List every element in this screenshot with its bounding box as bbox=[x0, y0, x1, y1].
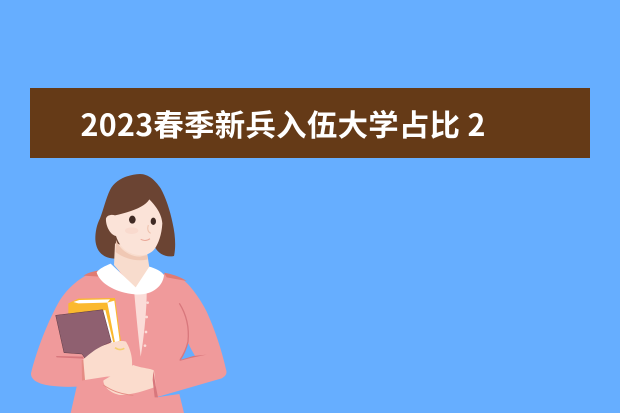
yellow book bbox=[68, 298, 121, 344]
collar bbox=[97, 264, 164, 294]
neck shadow bbox=[116, 240, 148, 260]
hair bbox=[95, 174, 175, 259]
face bbox=[106, 199, 162, 255]
placket bbox=[134, 293, 147, 357]
hands bbox=[82, 341, 158, 397]
body: pink cardigan bbox=[31, 271, 226, 413]
title text: 2023春季新兵入伍大学占比 2 bbox=[80, 101, 486, 145]
title banner bbox=[30, 88, 590, 158]
neck bbox=[114, 243, 149, 289]
buttons bbox=[144, 301, 149, 347]
maroon book bbox=[56, 310, 111, 358]
